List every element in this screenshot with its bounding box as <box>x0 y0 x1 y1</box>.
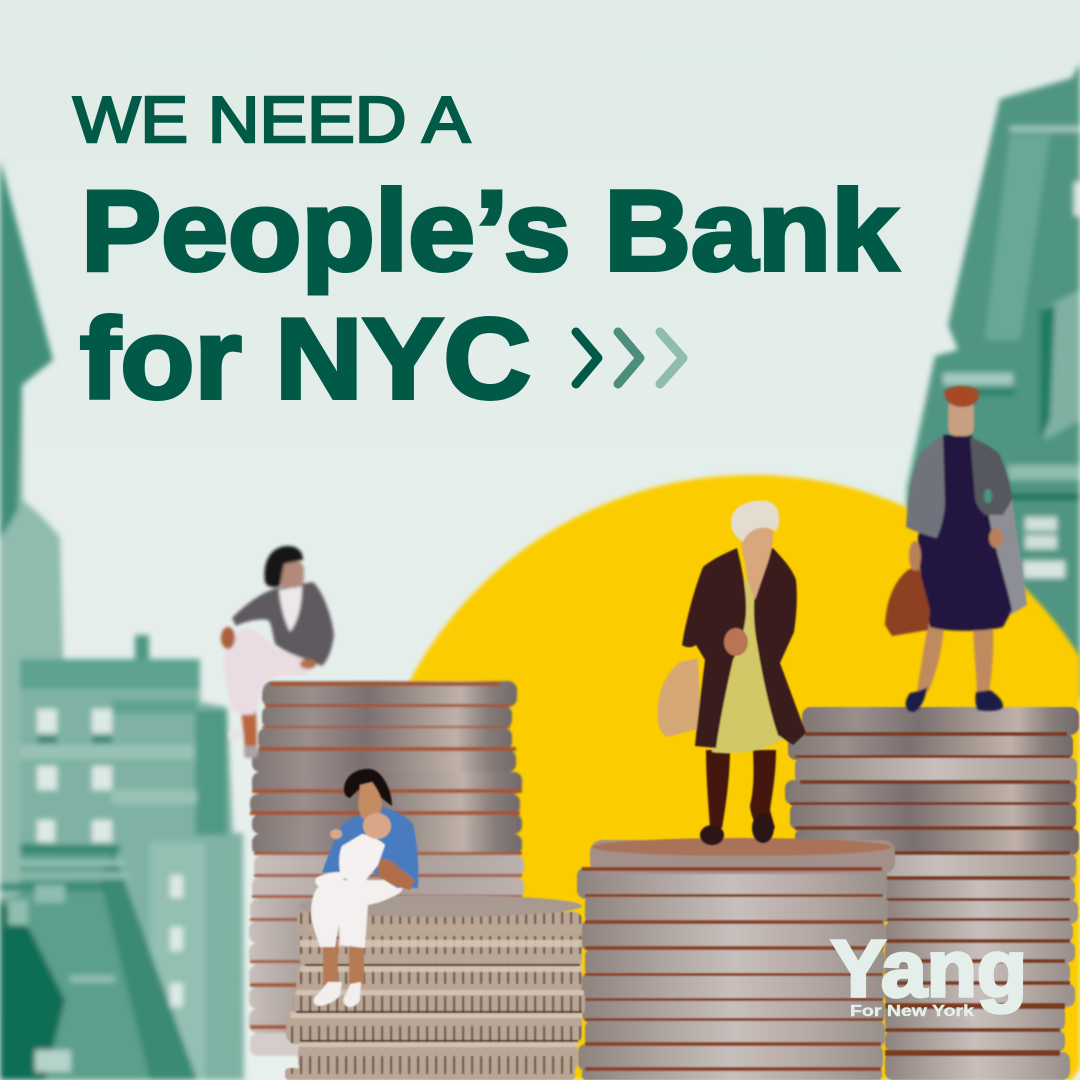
figure: woman sitting on top of back stack <box>221 546 334 758</box>
baby body <box>315 834 385 892</box>
coin stack: front left <box>285 895 585 1080</box>
coin stack: right <box>785 707 1079 1080</box>
dress <box>918 435 1012 631</box>
logo wordmark: Yang <box>831 924 1027 1013</box>
left buildings <box>0 160 244 1080</box>
shoes <box>906 687 1003 712</box>
white trousers <box>311 880 403 948</box>
white trousers <box>224 628 311 715</box>
arm <box>378 859 415 890</box>
face <box>278 560 304 588</box>
baby head <box>363 813 391 839</box>
skin knee hand <box>300 659 316 669</box>
legs <box>706 750 776 838</box>
jacket right <box>970 437 1012 515</box>
shoes <box>314 982 361 1007</box>
jacket back panel <box>985 498 1027 615</box>
logo: yang for new york <box>831 924 1027 1020</box>
building: tall left tower <box>0 160 70 900</box>
heading: we need a: WE NEED A <box>73 83 471 156</box>
hair <box>731 501 779 542</box>
legs <box>917 625 993 692</box>
bag <box>885 565 930 636</box>
yellow sun circle <box>365 475 1080 1080</box>
chevron 2 <box>618 332 640 384</box>
white shirt <box>279 586 302 632</box>
hat <box>944 386 979 407</box>
coin stack: middle <box>577 838 895 1080</box>
logo tagline: For New York <box>850 1003 974 1020</box>
hands <box>909 528 1003 571</box>
hair <box>264 546 303 587</box>
building: low dark foreground <box>0 842 197 1080</box>
face <box>358 782 382 822</box>
right building <box>905 63 1080 700</box>
hand <box>221 627 235 649</box>
figure: older woman with white hair <box>657 501 806 845</box>
blue shirt <box>322 808 418 888</box>
grey jacket <box>232 582 334 666</box>
heading: people's bank: People’s Bank <box>81 168 899 295</box>
baby hand <box>330 829 342 839</box>
figure: standing woman with red hat <box>885 386 1027 712</box>
shoes <box>700 813 774 845</box>
hair <box>344 769 392 806</box>
coin stack: back left <box>249 681 524 1056</box>
legs <box>323 940 364 986</box>
teal gap <box>984 489 992 503</box>
jacket left <box>906 435 945 538</box>
lower leg and shoes <box>229 708 258 758</box>
figure: woman holding baby <box>311 769 418 1007</box>
hand <box>724 628 748 656</box>
neck and face <box>741 525 773 600</box>
coat <box>682 548 806 748</box>
building: mid-rise <box>20 635 244 1080</box>
dress <box>712 578 785 753</box>
head <box>948 400 974 436</box>
arrows: triple chevrons <box>576 332 683 384</box>
chevron 1 <box>576 332 598 384</box>
chevron 3 <box>660 332 683 384</box>
heading: for nyc: for NYC <box>80 296 531 423</box>
bag <box>657 658 701 737</box>
